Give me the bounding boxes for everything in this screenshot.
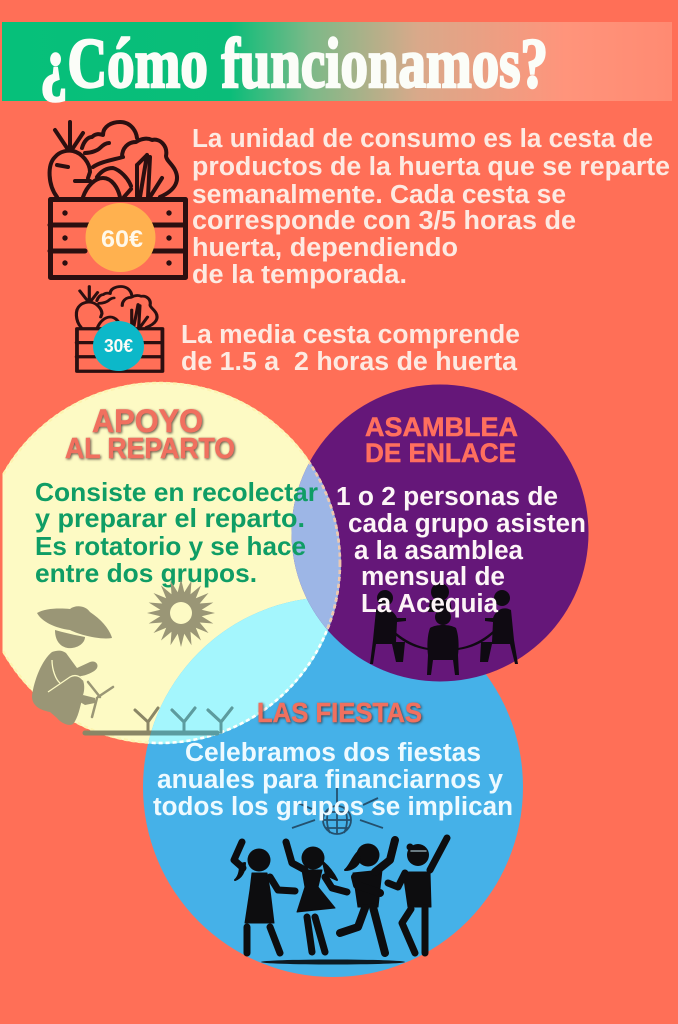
text: fiestas description [153, 739, 513, 821]
text: reparto description: y preparar el reparto. [35, 503, 305, 533]
icon: half vegetable crate with 30€ price [76, 286, 162, 371]
text: reparto description: entre dos grupos. [35, 558, 257, 588]
small crate and vegetables [76, 286, 162, 371]
panel: asamblea de enlace [336, 412, 586, 675]
price 30€: 30€ [104, 336, 133, 356]
heading: las fiestas: LAS FIESTAS [257, 697, 422, 728]
dancer 1 [234, 842, 295, 953]
heading: asamblea de enlace: ASAMBLEA [365, 412, 518, 442]
text: fiestas description: anuales para financiarnos y [157, 766, 504, 794]
title banner [2, 22, 672, 103]
heading: apoyo al reparto: AL REPARTO [65, 433, 235, 465]
icon: seedlings and ground [85, 708, 232, 733]
price 60€: 60€ [101, 226, 143, 253]
text: asamblea description: La Acequia [361, 590, 499, 618]
text: reparto description: Es rotatorio y se hace [35, 531, 306, 561]
icon: dancing people [234, 838, 447, 953]
text: half basket description: de 1.5 a 2 horas de huerta [181, 348, 518, 376]
icon: sun [147, 579, 215, 647]
text: full basket description: productos de la huerta que se reparte [192, 153, 670, 181]
panel: apoyo al reparto [32, 403, 318, 733]
overlap: reparto and asamblea [292, 464, 341, 630]
icon: people around a table [370, 583, 518, 675]
text: asamblea description: a la asamblea [354, 537, 524, 565]
text: asamblea description [336, 483, 586, 618]
text: reparto description: Consiste en recolectar [35, 477, 318, 507]
icon: full vegetable crate with 60€ price [50, 122, 186, 278]
heading: asamblea de enlace [365, 412, 518, 468]
panel: las fiestas [153, 697, 513, 964]
price badge 60€ [86, 203, 156, 272]
dashed outline over asamblea [309, 462, 342, 629]
text: asamblea description: mensual de [361, 563, 505, 591]
icon: farmer planting [32, 606, 113, 725]
text: fiestas description: todos los grupos se implican [153, 793, 513, 821]
text: asamblea description: 1 o 2 personas de [336, 483, 558, 511]
venn diagram circles [0, 382, 588, 977]
text: fiestas description: Celebramos dos fiestas [185, 739, 481, 767]
text: asamblea description: cada grupo asisten [348, 510, 586, 538]
circle: asamblea de enlace [292, 384, 588, 682]
text: full basket description: corresponde con 3/5 horas de [192, 207, 576, 235]
text: full basket description: semanalmente. Cada cesta se [192, 181, 566, 209]
dancer 2 [286, 842, 347, 952]
text: half basket description [181, 321, 520, 376]
dancer 3 [340, 840, 395, 953]
price badge 30€ [93, 321, 144, 371]
floor shadow [261, 960, 405, 964]
banner gradient bar [2, 22, 672, 101]
icon: disco ball [292, 788, 383, 834]
text: reparto description [35, 477, 318, 588]
left edge strip [0, 0, 2, 1024]
seedlings tinted over the cyan overlap [150, 706, 234, 736]
dashed outline over fiestas [148, 598, 338, 744]
text: half basket description: La media cesta comprende [181, 321, 520, 349]
circle: las fiestas [143, 597, 523, 977]
text: full basket description: de la temporada. [192, 261, 407, 289]
title: ¿Cómo funcionamos? [40, 25, 548, 103]
dashed outline of reparto circle [0, 383, 340, 743]
crate and vegetables [50, 122, 186, 278]
text: full basket description: La unidad de consumo es la cesta de [192, 125, 653, 153]
heading: asamblea de enlace: DE ENLACE [365, 438, 516, 468]
heading: apoyo al reparto: APOYO [92, 403, 203, 439]
circle: apoyo al reparto [0, 382, 341, 744]
text: full basket description [192, 125, 670, 289]
heading: apoyo al reparto [65, 403, 235, 465]
dancer 4 [388, 838, 447, 953]
crate nails [62, 210, 172, 266]
text: full basket description: huerta, dependiendo [192, 234, 458, 262]
overlap: reparto and fiestas [148, 598, 328, 744]
